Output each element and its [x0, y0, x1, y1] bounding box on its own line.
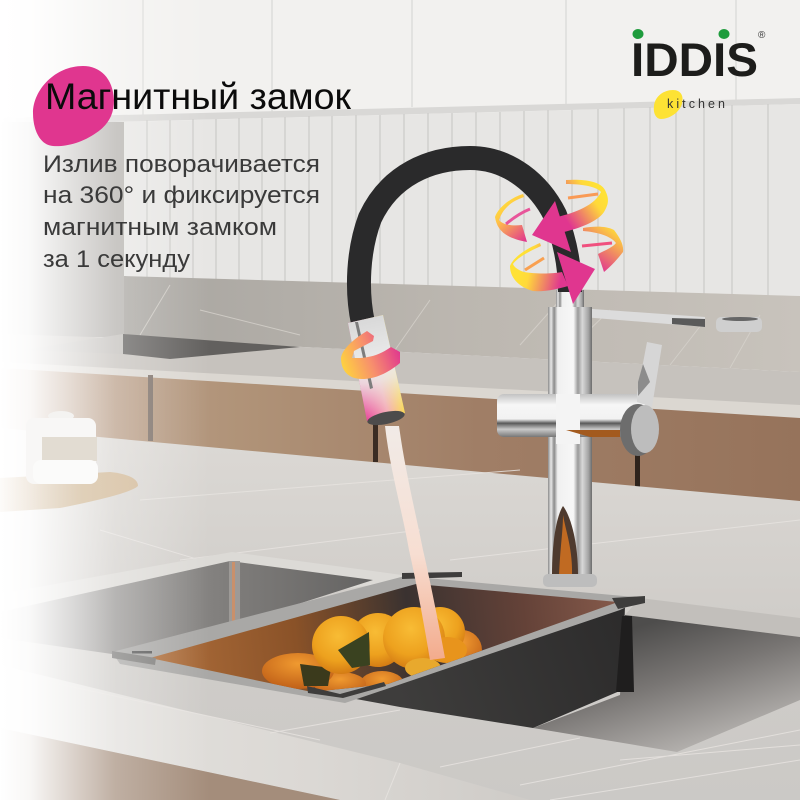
upper cabinets — [0, 0, 800, 125]
wall behind text — [0, 122, 126, 337]
lever shadow — [638, 364, 650, 396]
body text: Излив поворачивается — [43, 151, 320, 178]
flexible black hose — [359, 158, 570, 323]
colander rim — [112, 576, 645, 703]
lower wood front — [0, 728, 340, 800]
jar lid — [48, 411, 74, 421]
jar and tray — [0, 411, 138, 512]
logo: IDDIS kitchen — [631, 29, 766, 119]
colander interior — [150, 584, 618, 692]
left white fade — [0, 0, 210, 800]
orange reflection in body — [566, 430, 620, 437]
slatted wall panel — [124, 104, 800, 296]
worktop veins — [40, 470, 800, 800]
logo wordmark: IDDIS — [631, 33, 758, 86]
body-column joint highlight — [556, 394, 580, 444]
persimmons — [262, 607, 482, 697]
body text: за 1 секунду — [43, 246, 191, 273]
jar band — [42, 437, 97, 461]
colander dark front panel — [345, 606, 625, 728]
front worktop — [0, 428, 800, 800]
mixer lever — [637, 342, 662, 407]
body text: на 360° и фиксируется — [43, 182, 320, 209]
right sink bowl — [533, 615, 800, 752]
colander support leg — [616, 616, 634, 692]
faucet — [497, 290, 762, 587]
aerator nozzle — [348, 315, 406, 428]
horizontal body — [497, 394, 645, 437]
faucet column — [548, 307, 592, 577]
tray — [0, 472, 138, 512]
induction cooktop — [23, 334, 300, 359]
wood cabinet fronts — [0, 368, 800, 502]
colander corner clips — [112, 572, 645, 698]
base flange — [543, 574, 597, 587]
mixer knob — [620, 404, 659, 456]
green dots — [632, 29, 730, 39]
persimmon stem centre — [338, 632, 370, 668]
body text — [43, 151, 320, 273]
jar base — [33, 460, 98, 484]
persimmon stem left — [300, 664, 331, 686]
water stream — [385, 426, 445, 660]
back worktop — [0, 334, 800, 420]
body text: магнитным замком — [43, 214, 277, 241]
left sink bowl — [0, 552, 405, 654]
stone backsplash — [124, 276, 800, 372]
worktop front edge — [0, 665, 530, 800]
column reflection — [552, 506, 578, 580]
arrow: rear right ribbon — [582, 227, 623, 272]
rotation ribbon on aerator — [341, 331, 400, 379]
arrow: top pointing left — [532, 180, 608, 252]
pink blob behind title — [33, 66, 114, 146]
rotation arrows around spout — [495, 180, 623, 304]
kitchen label: kitchen — [667, 97, 725, 111]
yellow blob — [654, 90, 683, 119]
arrow: rear left ribbon — [495, 194, 530, 242]
registered mark: ® — [758, 30, 766, 41]
arrow: bottom pointing right — [510, 243, 595, 304]
spout arm with ring — [565, 307, 762, 332]
title: Магнитный замок — [45, 76, 352, 117]
jar body — [26, 418, 96, 484]
upper collar — [556, 290, 584, 307]
right bowl rim — [625, 598, 800, 637]
reflection highlight — [559, 515, 572, 578]
